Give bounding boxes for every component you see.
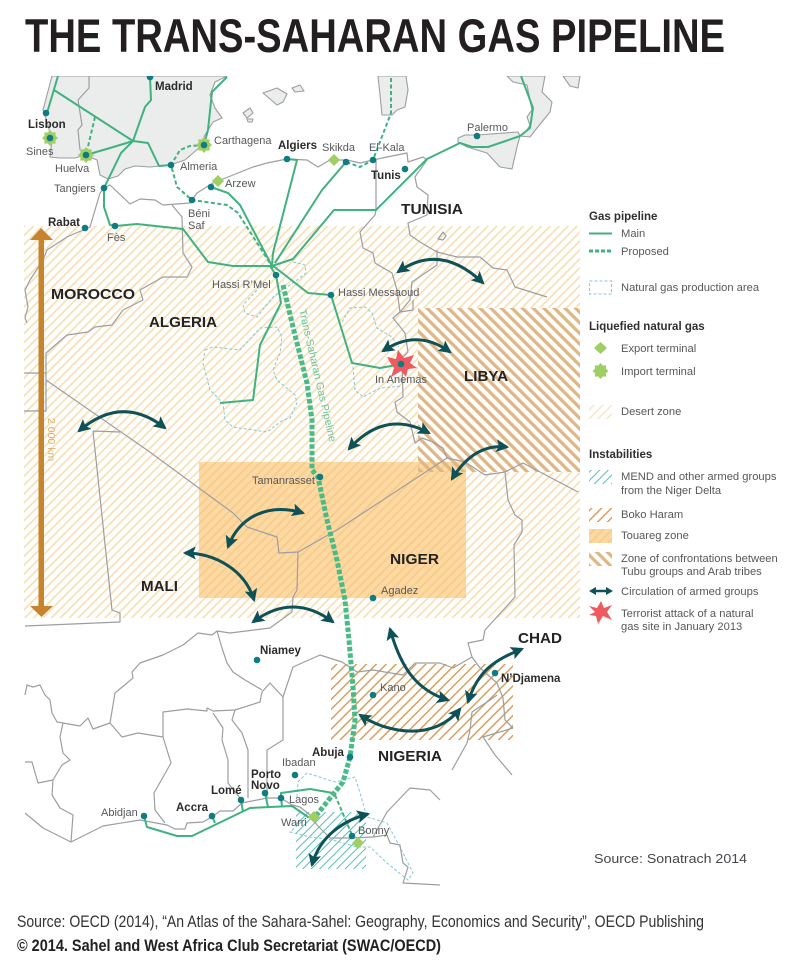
city labels: Fès — [107, 232, 126, 244]
country labels: CHAD — [518, 630, 562, 647]
city labels: Almeria — [180, 161, 218, 173]
scale arrow: 2,000 km — [30, 228, 57, 617]
city labels: Agadez — [381, 585, 418, 597]
city labels: Lisbon — [28, 119, 66, 131]
city labels: Madrid — [155, 81, 193, 93]
city labels: Porto — [251, 769, 281, 781]
legend: gas pipeline: Main — [621, 228, 645, 240]
legend: instabilities: Boko Haram — [621, 509, 683, 521]
city labels: In Anemas — [375, 374, 427, 386]
city labels — [26, 81, 561, 837]
city labels: Ibadan — [282, 757, 316, 769]
land: Iberia, Sardinia, Italy, Sicily — [43, 76, 580, 179]
legend: instabilities: gas site in January 2013 — [621, 621, 742, 633]
city labels: Bonny — [358, 825, 390, 837]
proposed gas pipelines — [86, 78, 391, 835]
city labels: Abidjan — [101, 807, 138, 819]
city labels: Béni — [188, 208, 210, 220]
city labels: Kano — [380, 682, 406, 694]
country labels: NIGERIA — [378, 748, 442, 765]
city labels: Palermo — [467, 122, 508, 134]
copyright line: © 2014. Sahel and West Africa Club Secretariat (SWAC/OECD) — [17, 937, 441, 955]
zone: Tubu and Arab confrontations — [418, 308, 580, 472]
legend: instabilities: Terrorist attack of a natural — [621, 608, 753, 620]
legend: instabilities: Circulation of armed groups — [621, 586, 759, 598]
legend: gas pipeline — [589, 211, 669, 258]
legend: instabilities: from the Niger Delta — [621, 485, 722, 497]
city labels: Lagos — [289, 794, 319, 806]
city labels: Abuja — [312, 747, 345, 759]
country borders — [24, 153, 578, 885]
country labels: NIGER — [390, 551, 439, 568]
city labels: Niamey — [260, 645, 302, 657]
city labels: Huelva — [55, 163, 90, 175]
main gas pipelines — [47, 76, 533, 836]
legend: instabilities — [589, 449, 778, 633]
legend: liquefied natural gas: Liquefied natural gas — [589, 321, 705, 333]
map source: Source: Sonatrach 2014 — [594, 851, 747, 866]
legend: liquefied natural gas: Export terminal — [621, 343, 696, 355]
legend: liquefied natural gas: Import terminal — [621, 366, 696, 378]
Portugal and Spain border — [78, 76, 89, 150]
legend: instabilities: Instabilities — [589, 449, 652, 461]
icon: terrorist attack star — [387, 350, 417, 377]
legend: production area: Natural gas production area — [621, 282, 760, 294]
map — [24, 74, 580, 885]
legend: gas pipeline: Gas pipeline — [589, 211, 657, 223]
LNG export terminals — [212, 154, 364, 849]
city labels: Hassi R’Mel — [212, 279, 271, 291]
country labels: ALGERIA — [149, 314, 217, 331]
LNG import terminals — [42, 130, 212, 163]
scale arrow: 2,000 km: 2 000 km — [45, 418, 57, 461]
legend: liquefied natural gas — [589, 321, 705, 379]
city labels: Sines — [26, 146, 54, 158]
legend: instabilities: MEND and other armed groups — [621, 471, 777, 483]
legend: desert zone — [589, 405, 681, 419]
city labels: Carthagena — [214, 135, 272, 147]
city labels: Hassi Messaoud — [338, 287, 419, 299]
city labels: Tamanrasset — [252, 475, 315, 487]
city labels: El-Kala — [369, 142, 405, 154]
country labels: MALI — [141, 578, 178, 595]
natural gas production areas — [203, 262, 413, 880]
city labels: Saf — [188, 220, 205, 232]
country labels: MOROCCO — [51, 286, 135, 303]
legend: desert zone: Desert zone — [621, 406, 681, 418]
zone: desert — [24, 226, 580, 618]
zone: Libya white ground — [418, 308, 580, 472]
city labels: Novo — [251, 780, 280, 792]
city labels: N’Djamena — [501, 673, 561, 685]
legend — [589, 211, 778, 633]
city labels: Lomé — [211, 785, 242, 797]
Trans-Saharan pipeline — [283, 285, 355, 817]
legend: instabilities: Touareg zone — [621, 530, 689, 542]
legend: instabilities: Zone of confrontations between — [621, 553, 778, 565]
city dots — [43, 74, 498, 839]
country labels: TUNISIA — [401, 201, 463, 218]
zone: Touareg — [199, 462, 466, 598]
city labels: Algiers — [278, 140, 317, 152]
country labels: LIBYA — [464, 368, 508, 385]
city labels: Arzew — [225, 178, 256, 190]
zone: MEND — [296, 812, 366, 869]
label: Trans-Saharan Gas Pipeline: Trans-Saharan Gas Pipeline — [296, 308, 338, 443]
city labels: Accra — [176, 802, 209, 814]
legend: gas pipeline: Proposed — [621, 246, 669, 258]
city labels: Warri — [281, 817, 307, 829]
arrows: circulation of armed groups — [79, 259, 522, 865]
city labels: Tangiers — [54, 183, 96, 195]
city labels: Skikda — [322, 142, 356, 154]
city labels: Rabat — [48, 217, 80, 229]
country labels — [51, 201, 562, 765]
city labels: Tunis — [371, 170, 401, 182]
zone: Boko Haram — [331, 664, 513, 740]
legend: instabilities: Tubu groups and Arab tribes — [621, 566, 762, 578]
